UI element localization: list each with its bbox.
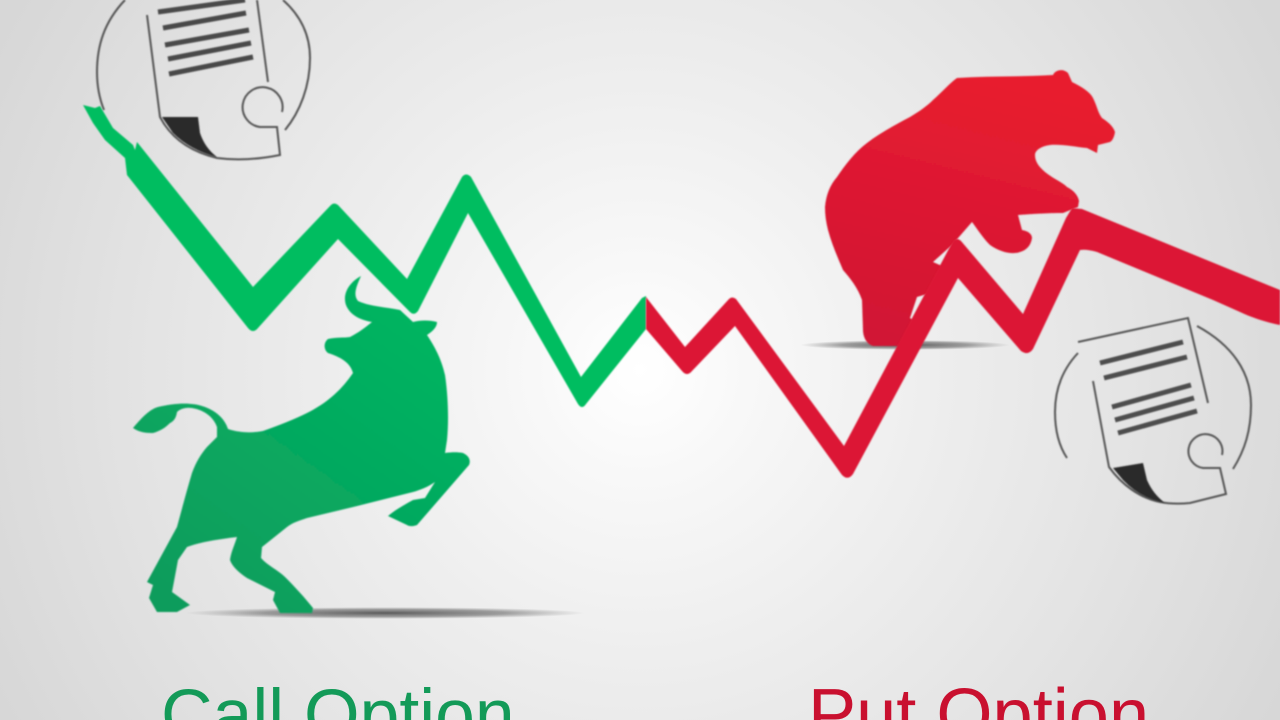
red falling line [646, 208, 1280, 478]
bull silhouette [133, 276, 470, 613]
icon: contract document, bottom right [1055, 318, 1251, 504]
shadow under bear [800, 340, 1010, 350]
icon: contract document, top left [97, 0, 310, 159]
bear silhouette [825, 70, 1115, 346]
green rising line [83, 105, 646, 407]
shadow under bull [185, 607, 585, 619]
